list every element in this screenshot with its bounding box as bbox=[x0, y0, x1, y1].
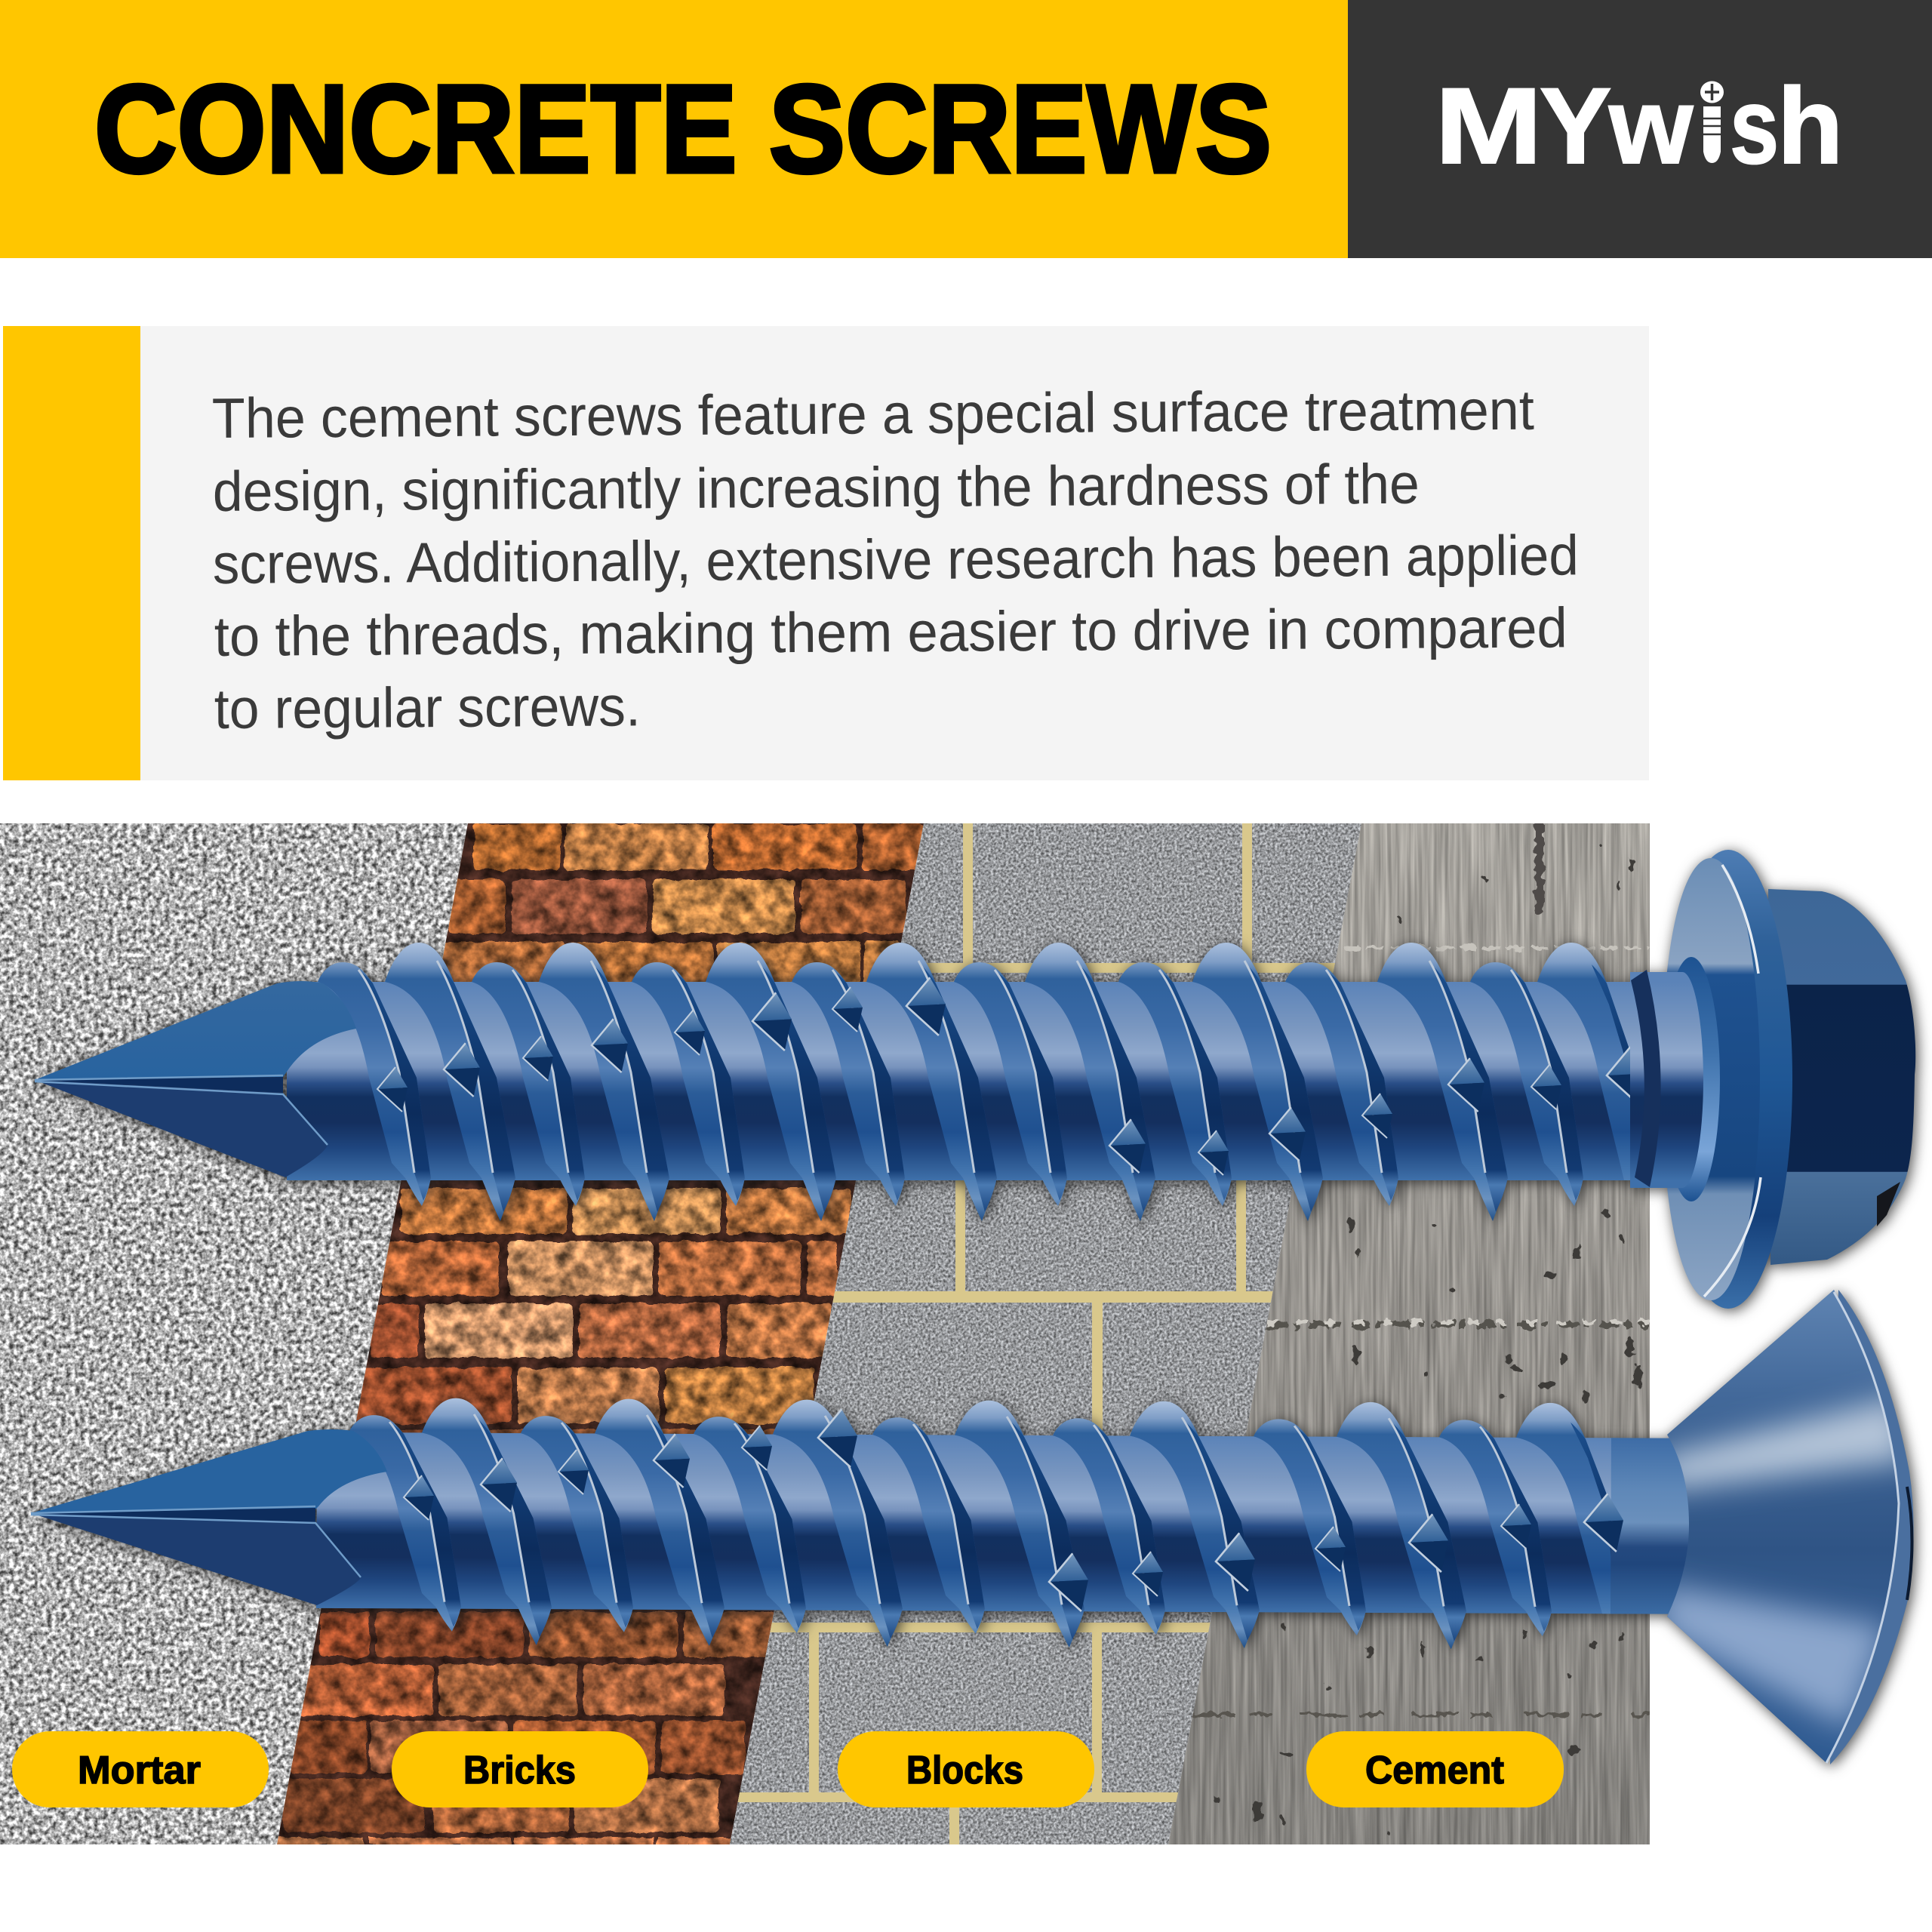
panel: brick texture bbox=[272, 819, 936, 1849]
label pill: Blocks bbox=[838, 1731, 1094, 1807]
panel: concrete block texture bbox=[724, 823, 1374, 1849]
logo wordmark: M bbox=[1435, 66, 1543, 186]
screw neck bbox=[1611, 1438, 1690, 1614]
screw shaft bbox=[316, 1398, 1690, 1651]
screw threads bbox=[318, 943, 1639, 1221]
notches bbox=[404, 1409, 1623, 1611]
screw: countersunk head bbox=[31, 1290, 1914, 1764]
screw point bbox=[31, 1429, 387, 1605]
logo wordmark: s bbox=[1730, 66, 1779, 186]
logo wordmark: Yw bbox=[1540, 66, 1694, 186]
label pill: Bricks: Bricks bbox=[463, 1749, 576, 1792]
logo wordmark: h bbox=[1777, 66, 1843, 186]
description text bbox=[212, 378, 1579, 740]
label pill: Mortar: Mortar bbox=[78, 1749, 201, 1792]
material backdrop bbox=[0, 819, 1653, 1849]
screw: hex flange head bbox=[35, 850, 1915, 1309]
label pill: Mortar bbox=[12, 1731, 269, 1807]
description text: screws. Additionally, extensive research has been applied bbox=[213, 523, 1579, 595]
label pill: Cement bbox=[1306, 1731, 1564, 1807]
panel: cement texture bbox=[1162, 823, 1653, 1844]
title: CONCRETE SCREWS bbox=[94, 60, 1272, 199]
panel: mortar texture bbox=[0, 823, 483, 1844]
logo wordmark bbox=[1435, 66, 1843, 186]
label pill: Blocks: Blocks bbox=[906, 1749, 1023, 1792]
yellow accent bar bbox=[3, 326, 140, 780]
description text: The cement screws feature a special surface treatment bbox=[212, 378, 1534, 450]
screw head bbox=[1660, 1290, 1914, 1764]
description text: design, significantly increasing the hardness of the bbox=[213, 452, 1420, 523]
screw shaft bbox=[287, 943, 1645, 1221]
screw threads bbox=[348, 1398, 1618, 1650]
description text: to regular screws. bbox=[214, 674, 641, 740]
label pill: Bricks bbox=[392, 1731, 648, 1807]
header banner bbox=[0, 0, 1348, 258]
icon: screw as the letter i: i bbox=[1696, 66, 1726, 186]
description panel bbox=[3, 326, 1649, 780]
screw head bbox=[1630, 850, 1915, 1309]
description text: to the threads, making them easier to drive in compared bbox=[214, 595, 1567, 668]
logo panel bbox=[1348, 0, 1932, 258]
notches bbox=[377, 977, 1646, 1175]
label pill: Cement: Cement bbox=[1365, 1749, 1504, 1792]
screw point bbox=[35, 981, 356, 1177]
